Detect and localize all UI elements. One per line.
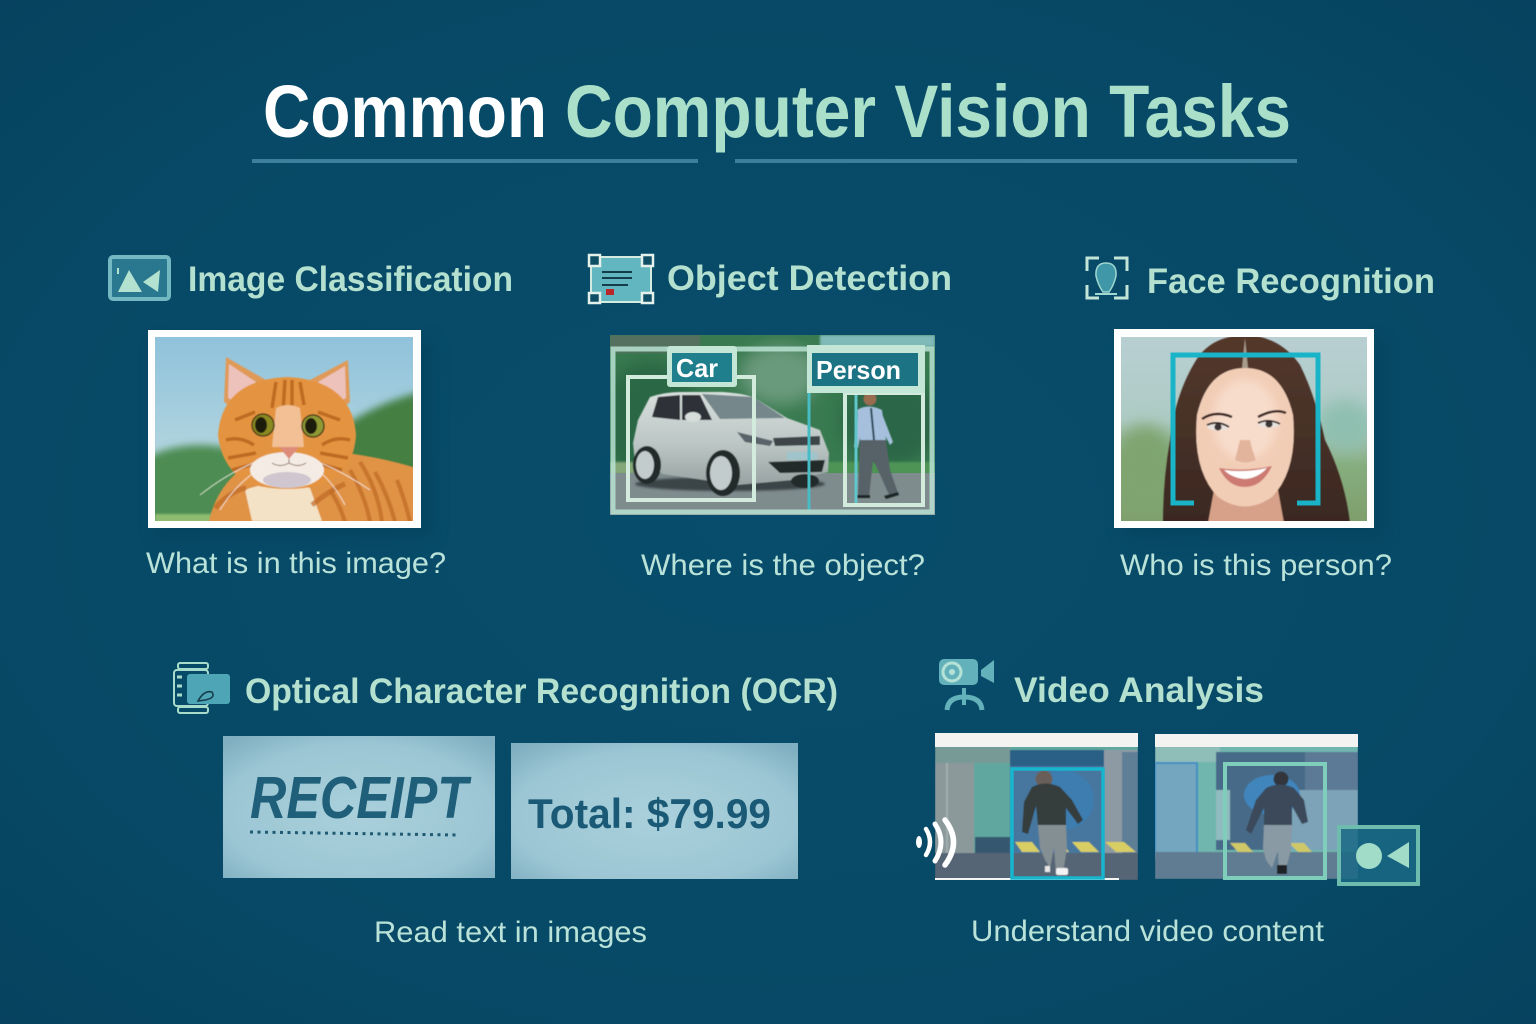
caption: What is in this image?: [146, 547, 446, 580]
photo: orange cat: [148, 330, 421, 528]
face bounding box: [1173, 355, 1318, 503]
tracking box: [1225, 764, 1325, 878]
neck: [1208, 490, 1284, 523]
cat eyes: [252, 414, 274, 436]
car: [633, 392, 829, 496]
title: Computer Vision Tasks: [565, 70, 1291, 153]
panel: video analysis: [916, 659, 1418, 948]
panel: face recognition: [1087, 258, 1435, 582]
icon: face scan: [1087, 258, 1127, 298]
heading: object detection: Object Detection: [667, 259, 952, 298]
caption: Who is this person?: [1120, 549, 1392, 582]
heading: video analysis: Video Analysis: [1014, 671, 1264, 710]
cat ears: [224, 357, 266, 410]
cat head: [218, 377, 356, 489]
panel: object detection: [589, 255, 952, 582]
tracking box: [1012, 769, 1103, 878]
car bounding box: Car: [676, 353, 718, 383]
icon: detection box: [589, 255, 653, 303]
car bounding box: [628, 346, 754, 500]
photo: smiling woman: [1110, 329, 1384, 538]
face: [1196, 368, 1294, 506]
card: receipt: RECEIPT: [250, 765, 472, 831]
person bounding box: Person: [816, 355, 901, 385]
icon: signal waves: [916, 820, 954, 865]
video frame 1: [935, 733, 1138, 880]
panel: image classification: [110, 257, 513, 580]
card: total: Total: $79.99: [528, 790, 771, 837]
person: [854, 392, 899, 499]
heading: face recognition: Face Recognition: [1147, 262, 1435, 301]
smile: [1219, 466, 1272, 487]
title: [252, 70, 1297, 163]
man walking: [1022, 770, 1083, 875]
brows and eyes: [1202, 411, 1286, 419]
heading: OCR: Optical Character Recognition (OCR): [245, 672, 838, 711]
title: Common: [263, 70, 547, 153]
hair: [1163, 335, 1350, 523]
panel: optical character recognition: [174, 663, 838, 949]
photo: car and person detection: [600, 335, 940, 515]
caption: Read text in images: [374, 916, 647, 949]
icon: image: [110, 257, 169, 299]
person bounding box: [807, 345, 925, 505]
icon: document scan: [174, 663, 230, 713]
man walking: [1246, 772, 1308, 874]
card: receipt: [223, 736, 495, 878]
heading: image classification: Image Classification: [188, 260, 513, 299]
icon: video camera: [939, 659, 994, 710]
card: total: [511, 743, 798, 879]
cat body: [208, 452, 416, 525]
caption: Where is the object?: [641, 549, 925, 582]
caption: Understand video content: [971, 915, 1325, 948]
icon: video badge: [1339, 827, 1418, 884]
video frame 2: [1155, 734, 1358, 879]
